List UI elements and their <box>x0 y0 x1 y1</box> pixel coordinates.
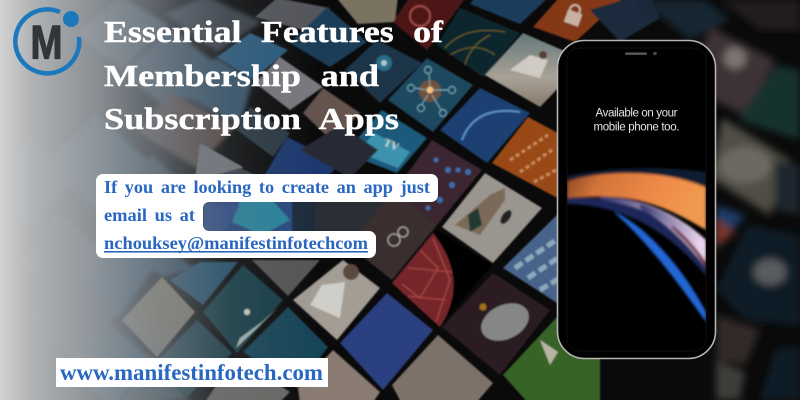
tile: top grey <box>335 0 398 24</box>
title: Membership and <box>104 58 379 93</box>
left grey fade overlay <box>0 0 320 400</box>
callout text: email us at <box>104 205 195 225</box>
tile: red and blue dots <box>395 140 482 225</box>
tile: yellow food <box>122 277 195 357</box>
callout text: nchouksey@manifestinfotechcom <box>104 233 368 253</box>
email underline <box>104 251 368 253</box>
tile: red top with ring <box>393 0 464 50</box>
logo dot <box>63 11 79 27</box>
tile: top left grey <box>255 0 330 30</box>
callout text: If you are looking to create an app just <box>104 177 430 197</box>
callout background <box>96 174 438 258</box>
phone screen outline <box>567 48 706 351</box>
tile: brown photo <box>303 88 360 142</box>
tile: top blue <box>470 0 552 24</box>
tile: dark blue <box>290 7 367 67</box>
tile: screens behind callout cut-out <box>203 200 292 235</box>
tile: grey white <box>255 57 323 110</box>
tiles: centre sharper region <box>122 0 660 400</box>
tile: orange text <box>492 117 580 210</box>
callout text <box>104 177 430 253</box>
tile: woman with phone <box>293 260 380 340</box>
contact callout <box>96 174 438 258</box>
tile: lower photo <box>392 335 493 400</box>
phone message: Available on your <box>596 108 678 120</box>
phone speaker <box>625 52 647 55</box>
tiles: blurred right region <box>640 0 800 400</box>
phone mockup <box>558 40 716 358</box>
logo <box>15 9 79 73</box>
tile: man at beach <box>485 33 585 107</box>
title: Essential Features of <box>104 14 444 49</box>
title <box>104 14 444 136</box>
tile: dark teal yellow lines <box>437 8 520 77</box>
tile: black with red sphere <box>392 230 492 328</box>
tile: old man portrait <box>442 273 550 375</box>
tile: blue arrow <box>217 33 288 80</box>
phone camera <box>653 52 657 55</box>
phone wallpaper swooshes <box>567 168 706 322</box>
tile: dark circle screen <box>345 40 422 103</box>
tile: blue-white pattern <box>503 215 590 315</box>
tile: blue lines <box>157 320 232 397</box>
tile: woman with microphone <box>442 173 542 263</box>
tile: dark mid filler <box>300 125 378 178</box>
tile: top right blue <box>590 0 660 42</box>
tile: TV: TV <box>382 137 401 154</box>
logo ring <box>15 9 79 73</box>
tile: earth from orbit <box>440 88 530 163</box>
tile: bottom grey <box>205 358 290 400</box>
website badge: www.manifestinfotech.com <box>60 360 323 385</box>
tile: blue panel <box>340 293 433 390</box>
tile: TV <box>345 110 427 173</box>
tile: above teal <box>170 262 238 305</box>
tile: grey white low <box>195 143 243 178</box>
tile: dark circuit <box>237 107 290 157</box>
tile: orange locks <box>533 0 632 42</box>
title: Subscription Apps <box>104 101 399 136</box>
logo letter: M <box>30 16 62 68</box>
tile: teal low <box>243 307 328 388</box>
tile: blue dots under title <box>263 137 340 178</box>
tile: teal graph <box>203 265 283 353</box>
tile: bottom photo <box>298 350 380 400</box>
phone message: mobile phone too. <box>594 122 680 134</box>
tile: dark brown with rings <box>348 190 437 280</box>
tile: dotted grey under callout <box>252 260 320 296</box>
tile: green photo <box>503 317 600 400</box>
tile: dark grey filler <box>205 168 262 178</box>
tiles: soft faded left region <box>0 0 262 400</box>
tile: network nodes <box>388 58 473 132</box>
